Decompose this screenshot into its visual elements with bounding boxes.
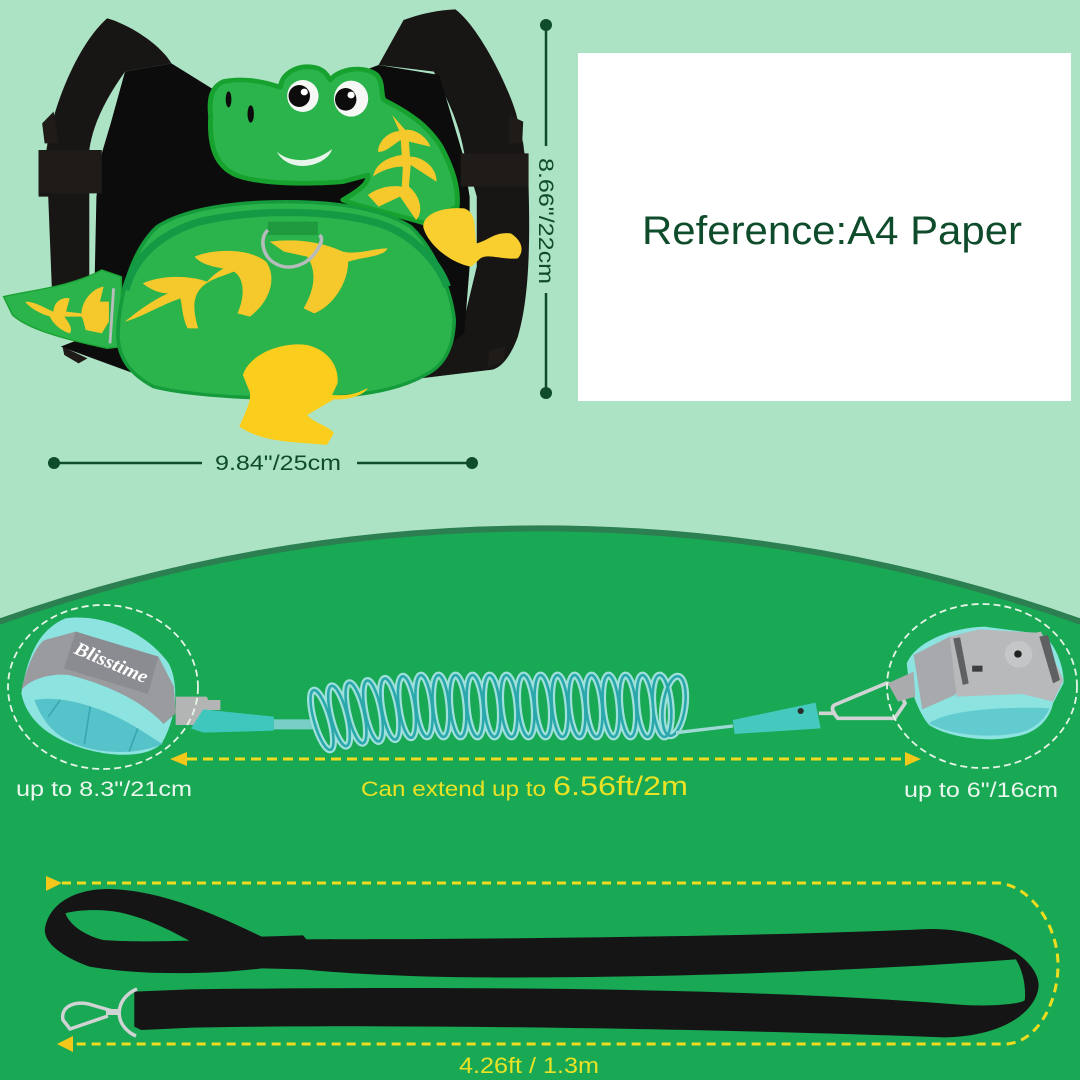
dinosaur smile [277, 149, 332, 166]
upper yellow foot [423, 208, 522, 267]
backpack black body [61, 63, 470, 380]
height dimension [534, 19, 557, 399]
extension label: Can extend up to [361, 778, 546, 801]
panel: A4 paper reference [578, 53, 1071, 401]
cuff padding [21, 617, 175, 755]
panel: green lower section [0, 528, 1080, 1080]
width dimension [48, 452, 478, 475]
zipper pull [110, 288, 114, 343]
neck leaf pattern [368, 115, 436, 220]
tail leaf pattern [25, 287, 109, 333]
connector cone [733, 703, 821, 734]
D-ring [263, 222, 321, 267]
connector cone [191, 709, 274, 733]
right cuff dashed circle [887, 604, 1077, 768]
dinosaur head and neck [210, 67, 457, 223]
extension arrow [170, 752, 921, 766]
lower yellow foot [239, 344, 368, 445]
left wrist cuff [21, 617, 313, 755]
strap adjusters [39, 112, 529, 368]
metal swivel hook [63, 989, 137, 1036]
coil cord [306, 674, 689, 752]
cuff inner [929, 708, 1050, 736]
leash length label: 4.26ft / 1.3m [459, 1053, 599, 1078]
left shoulder strap [39, 18, 171, 287]
black hand leash [45, 889, 1039, 1037]
connector buckle [176, 697, 220, 725]
panel: A4 paper reference: Reference:A4 Paper [642, 209, 1022, 253]
brand label [64, 632, 158, 694]
right wrist cuff [676, 627, 1064, 739]
width dimension: 9.84"/25cm [215, 452, 341, 475]
dinosaur tail [4, 270, 121, 348]
pouch leaf pattern [125, 251, 271, 328]
dinosaur eyes [226, 80, 368, 123]
buckle [950, 629, 1063, 702]
front pouch [118, 202, 454, 398]
height dimension: 8.66"/22cm [534, 158, 557, 284]
grey strap [21, 632, 176, 724]
extension value: 6.56ft/2m [553, 771, 688, 801]
pouch zipper [126, 212, 447, 290]
left cuff size: up to 8.3"/21cm [16, 778, 192, 801]
left cuff dashed circle [8, 605, 198, 769]
carabiner [819, 683, 905, 718]
cuff inner [34, 699, 163, 752]
right cuff size: up to 6"/16cm [904, 779, 1058, 802]
right shoulder strap [379, 9, 529, 380]
brand name: Blisstime [70, 638, 152, 688]
cuff padding [907, 627, 1064, 739]
wire [676, 726, 733, 733]
grey webbing [888, 672, 915, 702]
leash length arrow [46, 876, 1058, 1052]
backpack: dinosaur harness [4, 9, 529, 445]
